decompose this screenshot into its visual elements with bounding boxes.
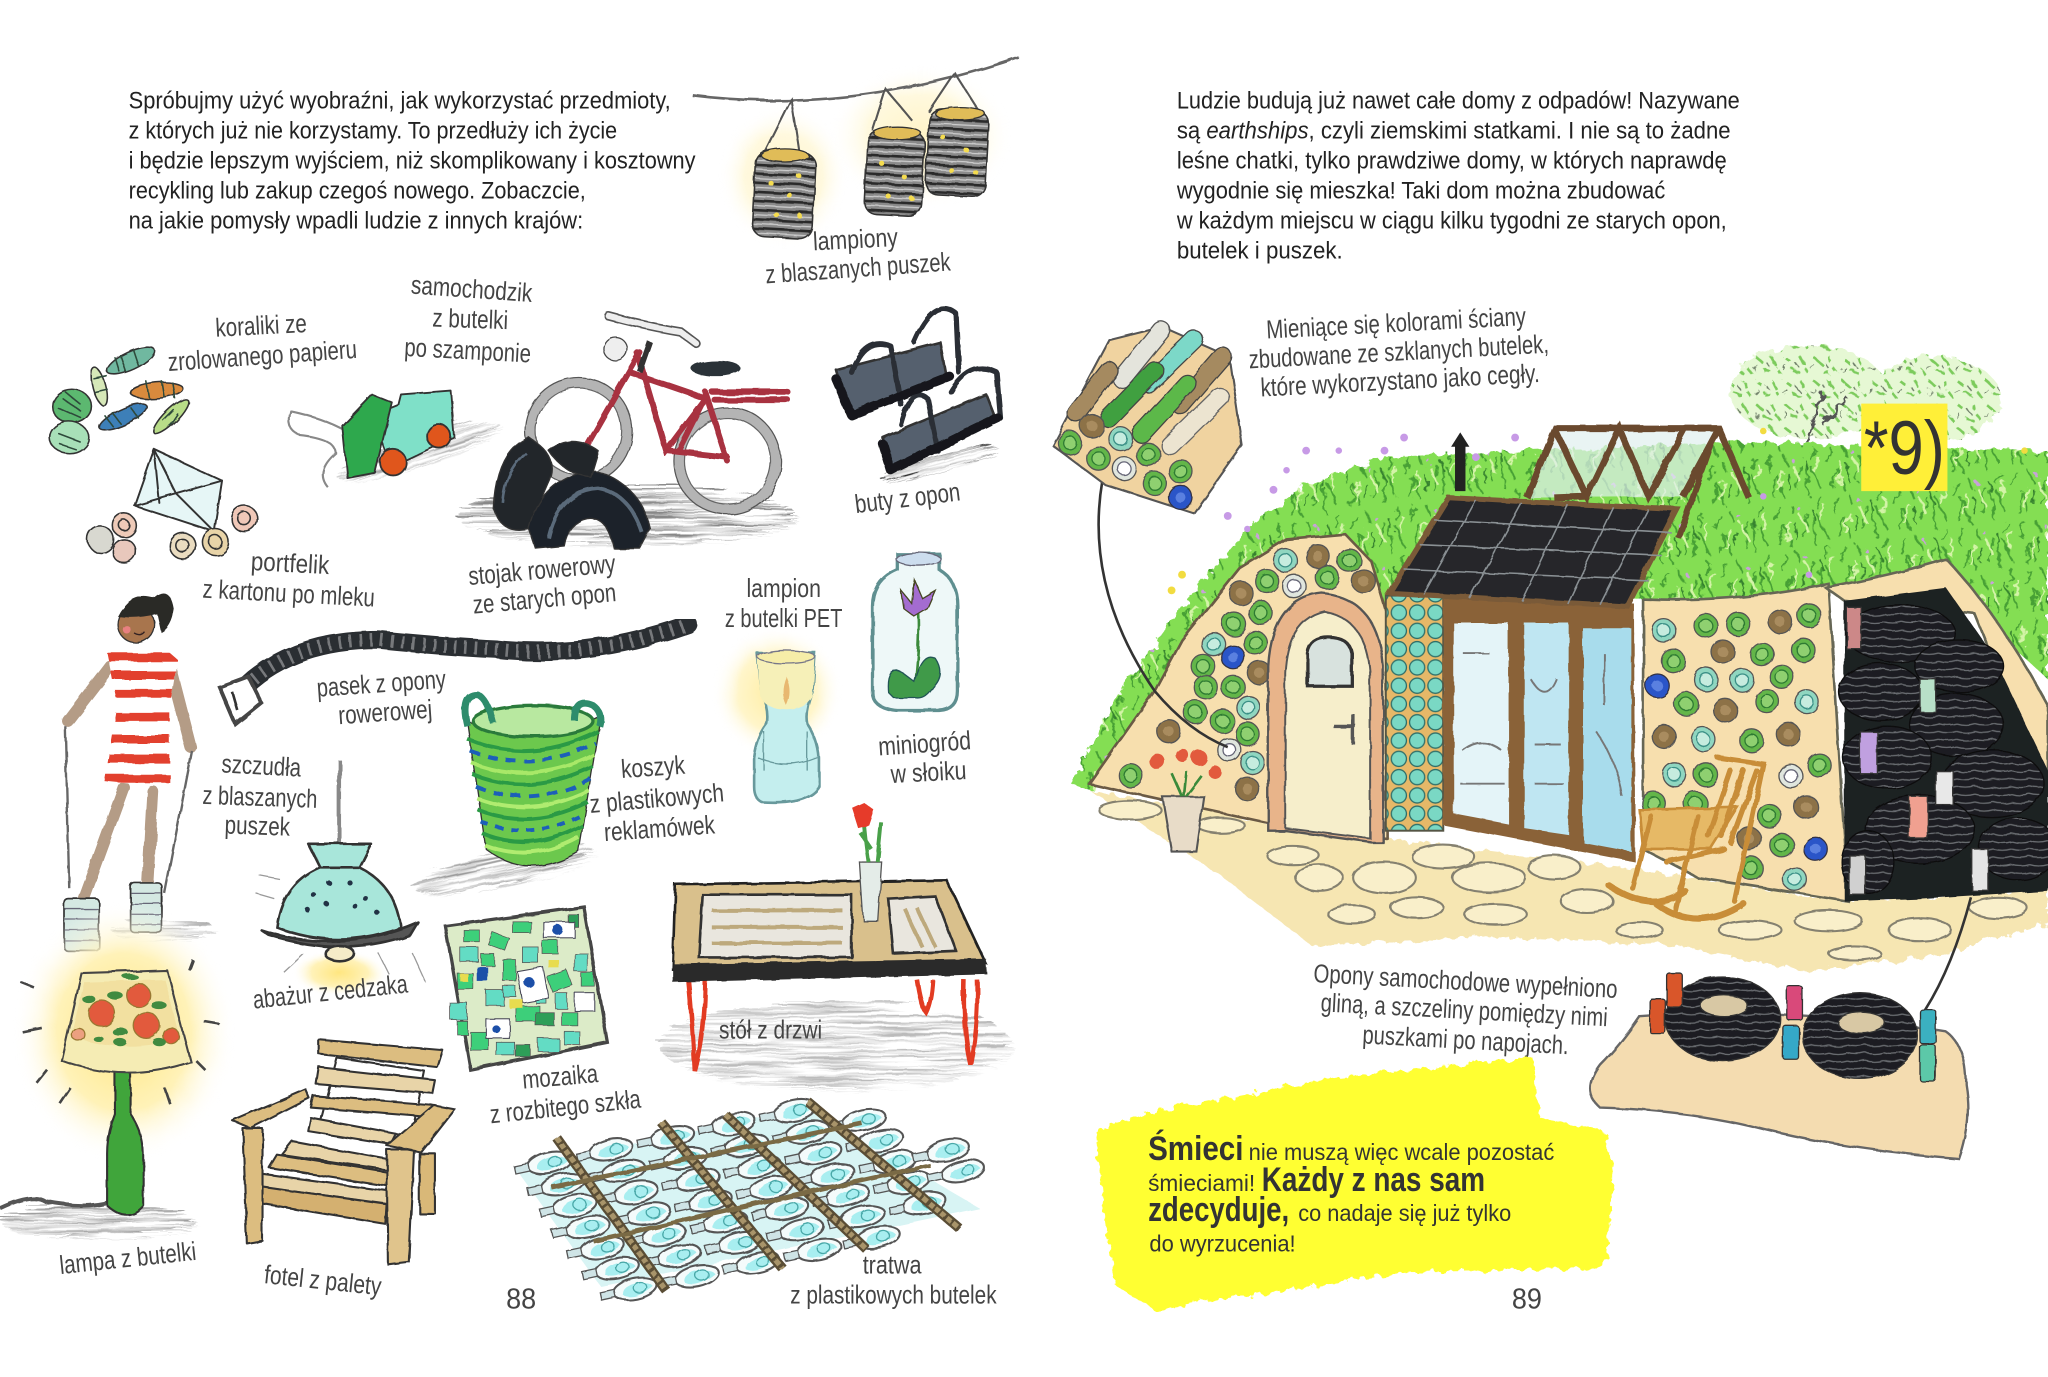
- caption: koraliki: [167, 308, 358, 377]
- wildflowers: [1224, 434, 1812, 578]
- caption: szczudła: [202, 748, 318, 842]
- tyre wall: [1826, 559, 2048, 901]
- illustration: plastic bag basket: [410, 695, 601, 905]
- caption: koraliki: zrolowanego papieru: [167, 334, 358, 377]
- caption: pasek z opony: rowerowej: [337, 694, 433, 730]
- yellow callout: nie muszą więc wcale pozostać: [1249, 1139, 1555, 1165]
- page number 89: 89: [1512, 1284, 1542, 1316]
- caption: stół z drzwi: stół z drzwi: [719, 1014, 822, 1044]
- illustration: flower garden in jar: [872, 552, 957, 711]
- caption: bottle walls: zbudowane ze szklanych butelek,: [1248, 329, 1550, 374]
- illustration: plastic bottle raft: [513, 1064, 996, 1318]
- green hill roof: [1071, 441, 2048, 790]
- intro text: [129, 87, 696, 235]
- caption: szczudła: puszek: [224, 809, 291, 842]
- caption: miniogród: [877, 725, 972, 789]
- caption: koszyk: z plastikowych: [588, 777, 725, 819]
- yellow footnote tag: *9): [1864, 406, 1945, 491]
- caption: pasek z opony: pasek z opony: [316, 664, 447, 703]
- illustration: tyre sample with cans and pointer: [1590, 897, 1971, 1159]
- caption: portfelik: z kartonu po mleku: [202, 574, 376, 613]
- caption: samochodzik: z butelki: [432, 303, 509, 335]
- caption: mozaika: z rozbitego szkła: [488, 1084, 643, 1129]
- caption: tyres: gliną, a szczeliny pomiędzy nimi: [1320, 987, 1609, 1032]
- illustration: tin can lanterns on a string: [692, 57, 1019, 248]
- teal bottle strip: [1386, 596, 1443, 831]
- caption: bottle walls: [1248, 301, 1550, 403]
- yellow callout: Śmieci: [1148, 1130, 1243, 1168]
- caption: bottle walls: Mieniące się kolorami ściany: [1266, 301, 1527, 345]
- illustration: pallet armchair: [232, 1040, 455, 1264]
- caption: tratwa: z plastikowych butelek: [790, 1280, 997, 1310]
- illustration: lamp from a bottle: [0, 901, 235, 1238]
- illustration: bottle brick sample with pointer: [1053, 327, 1242, 747]
- caption: samochodzik: samochodzik: [410, 270, 534, 308]
- illustration: girl on tin can stilts: [64, 594, 216, 951]
- left bottle wall: [1089, 534, 1387, 839]
- caption: stojak rowerowy: stojak rowerowy: [467, 548, 617, 591]
- yellow callout: co nadaje się już tylko: [1298, 1200, 1511, 1226]
- caption: portfelik: [202, 546, 376, 613]
- caption: koszyk: [588, 750, 725, 847]
- intro text: z których już nie korzystamy. To przedłuży ich życie: [129, 117, 617, 144]
- page number 88: 88: [506, 1284, 536, 1316]
- illustration: tyre shoes: [836, 309, 1000, 486]
- caption: bottle walls: które wykorzystano jako cegły.: [1260, 358, 1540, 403]
- yellow callout: do wyrzucenia!: [1149, 1230, 1296, 1256]
- illustration: colander lamp: [256, 760, 426, 997]
- panel: left page: [0, 57, 1019, 1318]
- intro text: recykling lub zakup czegoś nowego. Zobaczcie,: [129, 178, 586, 205]
- caption: lampion z butelki PET: lampion: [746, 573, 821, 603]
- caption: samochodzik: [404, 270, 534, 368]
- caption: stojak rowerowy: [467, 548, 617, 620]
- caption: tyres: Opony samochodowe wypełniono: [1313, 958, 1618, 1004]
- illustration: tyre belt: [219, 624, 688, 724]
- yellow callout: śmieciami!: [1148, 1170, 1255, 1196]
- intro text: Spróbujmy użyć wyobraźni, jak wykorzystać przedmioty,: [129, 87, 671, 114]
- caption: tratwa: [790, 1249, 997, 1310]
- caption: portfelik: portfelik: [250, 546, 331, 580]
- illustration: milk carton wallet and coins: [88, 449, 257, 563]
- caption: stojak rowerowy: ze starych opon: [472, 577, 617, 620]
- illustration: door table: [660, 802, 1012, 1089]
- caption: miniogród: miniogród: [877, 725, 972, 762]
- caption: szczudła: z blaszanych: [202, 780, 318, 814]
- panel: right page: [1053, 87, 2048, 1316]
- ground with stones: [1089, 790, 2048, 972]
- intro text: Ludzie budują już nawet całe domy z odpadów! Nazywane: [1177, 87, 1740, 114]
- intro text: są earthships, czyli ziemskimi statkami. I nie są to żadne: [1177, 117, 1731, 144]
- caption: tratwa: tratwa: [863, 1249, 922, 1279]
- illustration: earthship house: [1071, 345, 2048, 972]
- flower pot: [1149, 748, 1221, 852]
- illustration: shampoo bottle toy car: [290, 391, 504, 492]
- caption: buty z opon: buty z opon: [853, 476, 962, 519]
- intro text: na jakie pomysły wpadli ludzie z innych krajów:: [129, 208, 583, 235]
- caption: abażur z cedzaka: abażur z cedzaka: [251, 968, 409, 1015]
- intro text: leśne chatki, tylko prawdziwe domy, w których naprawdę: [1177, 148, 1727, 174]
- door: [1268, 593, 1383, 842]
- caption: fotel z palety: fotel z palety: [263, 1259, 383, 1301]
- caption: koszyk: reklamówek: [603, 809, 717, 847]
- tree on the hill: [1731, 345, 2001, 444]
- caption: tyres: puszkami po napojach.: [1362, 1019, 1569, 1060]
- caption: lampiony: z blaszanych puszek: [764, 246, 952, 289]
- caption: mozaika: mozaika: [521, 1058, 600, 1095]
- chimney: [1451, 432, 1469, 491]
- caption: miniogród: w słoiku: [889, 755, 967, 789]
- caption: lampa z butelki: lampa z butelki: [58, 1236, 198, 1280]
- intro text: [1176, 87, 1740, 265]
- illustration: broken glass mosaic: [445, 906, 607, 1070]
- illustration: paper beads: [50, 341, 192, 453]
- caption: lampion z butelki PET: z butelki PET: [725, 603, 842, 633]
- intro text: i będzie lepszym wyjściem, niż skomplikowany i kosztowny: [129, 148, 696, 174]
- illustration: bicycle on tyre rack: [457, 316, 797, 549]
- caption: koraliki: koraliki ze: [215, 308, 308, 343]
- glass front: [1443, 596, 1635, 862]
- wooden greenhouse truss: [1527, 426, 1749, 538]
- caption: samochodzik: po szamponie: [404, 332, 532, 368]
- right bottle wall: [1642, 584, 1848, 901]
- yellow callout: zdecyduje,: [1148, 1191, 1289, 1229]
- intro text: butelek i puszek.: [1177, 238, 1343, 265]
- yellow callout: Każdy z nas sam: [1262, 1161, 1485, 1199]
- caption: pasek z opony: [316, 664, 447, 730]
- illustration: PET bottle lantern: [712, 627, 842, 802]
- caption: lampion z butelki PET: [725, 573, 842, 633]
- solar panel: [1390, 498, 1677, 606]
- caption: koszyk: koszyk: [620, 750, 687, 784]
- caption: lampiony: lampiony: [812, 222, 899, 256]
- intro text: w każdym miejscu w ciągu kilku tygodni ze starych opon,: [1176, 208, 1727, 235]
- caption: szczudła: szczudła: [221, 748, 302, 783]
- rocking chair: [1609, 758, 1763, 919]
- caption: lampiony: [764, 222, 952, 289]
- caption: mozaika: [488, 1058, 643, 1129]
- yellow callout: [1096, 1058, 1614, 1310]
- caption: tyres: [1313, 958, 1618, 1060]
- intro text: wygodnie się mieszka! Taki dom można zbudować: [1176, 178, 1665, 205]
